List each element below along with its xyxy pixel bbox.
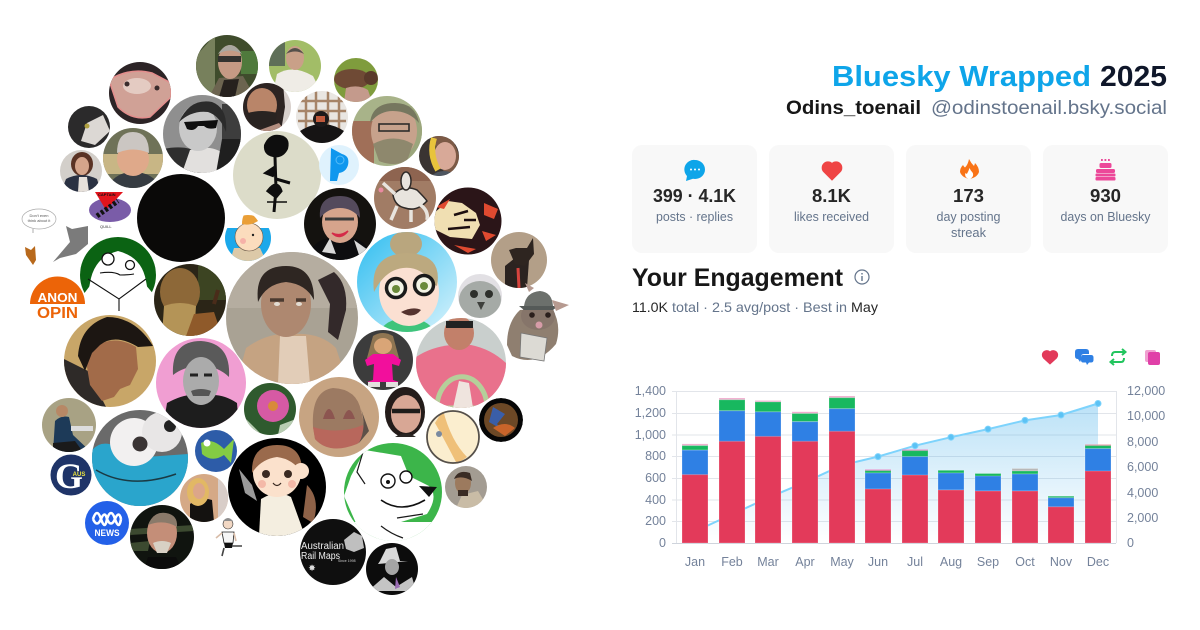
icon: birthday cake <box>1096 159 1116 180</box>
bar: Aug <box>938 470 964 543</box>
avatar: stern man with crow <box>226 252 358 384</box>
chart grid <box>672 391 1116 543</box>
avatar: smiling man in beanie <box>103 128 163 188</box>
right axis labels: 0 <box>1127 536 1134 550</box>
month labels: Mar <box>757 555 779 569</box>
month labels: Nov <box>1050 555 1073 569</box>
month labels: Dec <box>1087 555 1109 569</box>
avatar: cartoon blonde with glasses <box>357 231 457 332</box>
avatar: cartoon reporter with quiff <box>225 212 271 261</box>
avatar: small black and tan dog <box>491 232 547 288</box>
avatar: man in pink unicorn shirt <box>416 316 506 408</box>
avatar: Australian Rail Maps logo: Since 1998 <box>338 559 356 563</box>
month labels: Feb <box>721 555 743 569</box>
avatar: Anon Opin logo: OPIN <box>37 305 78 322</box>
avatar: possum with hat and newspaper <box>507 283 569 361</box>
avatar: bearded wizard with cigar <box>154 264 226 336</box>
icon: info <box>855 270 869 284</box>
avatar: grey haired man with moustache <box>352 96 422 166</box>
right axis labels: 12,000 <box>1127 384 1165 398</box>
avatar: bookshelf photographer <box>296 91 348 143</box>
avatar: tuxedo cat <box>68 106 110 148</box>
avatar: Australian Rail Maps logo: Rail Maps <box>301 551 340 562</box>
panel: day posting streak <box>906 145 1031 253</box>
bar: Jun <box>865 470 891 543</box>
right axis labels: 10,000 <box>1127 409 1165 423</box>
avatar: Guardian AUS logo <box>50 454 92 496</box>
avatar: bearded man <box>243 83 291 131</box>
bar: May <box>829 396 855 543</box>
icon: chat bubble <box>684 160 705 181</box>
panel: likes received: 8.1K <box>812 186 851 206</box>
panel: day posting streak: 173 <box>953 186 984 206</box>
panel: likes received: likes received <box>794 209 869 224</box>
avatar: blonde woman in black <box>180 474 228 522</box>
left axis labels: 600 <box>645 471 666 485</box>
avatar: captain quill badge: QUILL <box>100 224 112 229</box>
avatar: captain quill badge: CAPTAIN <box>98 192 116 197</box>
left axis labels: 1,400 <box>635 384 666 398</box>
avatar: black stick figure on cream <box>233 131 321 219</box>
bar: Jul <box>902 450 928 543</box>
right axis labels: 4,000 <box>1127 486 1158 500</box>
avatar: ABC News logo: NEWS <box>94 528 120 538</box>
chart legend icons <box>1042 349 1160 365</box>
avatar: blonde hair drawing <box>426 410 480 464</box>
avatar: speech bubble comic: Don't even <box>30 213 48 218</box>
month labels: Jan <box>685 555 705 569</box>
avatar: woman in dark jacket <box>60 150 102 192</box>
month labels: Aug <box>940 555 962 569</box>
panel: days on Bluesky <box>1043 145 1168 253</box>
avatar: blue muppet <box>92 410 188 506</box>
avatar: noir man in hat <box>366 543 418 595</box>
avatar: smiling woman with red lipstick <box>304 188 376 260</box>
cumulative area <box>695 404 1098 543</box>
user name and handle <box>786 98 1167 119</box>
avatar: speech bubble comic <box>22 209 88 265</box>
panel: days on Bluesky: 930 <box>1090 186 1121 206</box>
panel: likes received <box>769 145 894 253</box>
avatar: Australian Rail Maps logo <box>300 519 366 585</box>
heading: Your Engagement: Your Engagement <box>632 264 844 292</box>
avatar: captain quill badge <box>89 192 131 229</box>
avatar: Guardian AUS logo: G <box>55 456 83 496</box>
avatar: ABC News logo <box>85 501 129 545</box>
avatar: baby hippo <box>109 62 171 124</box>
icon: quotes <box>1145 350 1160 365</box>
engagement summary: 11.0K <box>632 299 669 315</box>
avatar bubble cluster <box>22 35 569 595</box>
avatar: wildlife photographer <box>42 398 96 452</box>
engagement summary <box>632 299 878 315</box>
panel: day posting streak: streak <box>951 225 986 240</box>
panel: days on Bluesky: days on Bluesky <box>1060 209 1151 224</box>
panel: day posting streak: day posting <box>936 209 1000 224</box>
stacked bars <box>682 396 1111 543</box>
bar: Dec <box>1085 445 1111 543</box>
avatar: painted stone <box>299 377 379 457</box>
bar: Oct <box>1012 468 1038 543</box>
avatar: Caravaggio portrait <box>445 466 488 508</box>
panel: posts and replies: posts · replies <box>656 209 733 224</box>
avatar: green frog cartoon <box>80 237 156 313</box>
avatar: Guardian AUS logo: AUS <box>73 472 85 478</box>
avatar: woman with dark hair and round glasses <box>385 387 425 437</box>
bar: Feb <box>719 398 745 543</box>
right axis labels: 6,000 <box>1127 460 1158 474</box>
bar: Apr <box>792 412 818 543</box>
avatar: dark fantasy art <box>479 398 523 442</box>
avatar: cartoon white wolf on green <box>344 443 442 541</box>
avatar: man in white shirt <box>269 40 321 92</box>
avatar: brown curly dog <box>334 58 378 102</box>
avatar: black and white woman in sunglasses <box>163 95 242 173</box>
avatar: green fish <box>195 430 237 472</box>
avatar: pink cartoon dog in tracksuit <box>353 330 413 390</box>
left axis labels: 800 <box>645 449 666 463</box>
left axis labels: 1,200 <box>635 406 666 420</box>
avatar: dark haired man in profile <box>64 315 156 407</box>
user name and handle: Odins_toenail <box>786 98 921 119</box>
avatar: Australian Rail Maps logo: Australian <box>301 541 344 552</box>
avatar: Australian Rail Maps logo: ✸ <box>308 563 316 573</box>
user name and handle: @odinstoenail.bsky.social <box>931 98 1167 119</box>
right axis labels <box>1127 384 1165 550</box>
cumulative line <box>695 400 1101 531</box>
left axis labels: 0 <box>659 536 666 550</box>
avatar: pink flower <box>244 383 296 435</box>
icon: replies <box>1075 349 1094 365</box>
bar: Nov <box>1048 496 1074 543</box>
title: Bluesky Wrapped <box>832 61 1091 93</box>
bar: Jan <box>682 444 708 543</box>
panel: posts and replies <box>632 145 757 253</box>
icon: reposts <box>1110 349 1126 365</box>
avatar: graffiti mouse <box>374 167 436 229</box>
avatar: Anon Opin logo <box>30 276 85 322</box>
avatar: older man at night <box>130 505 194 569</box>
right axis labels: 8,000 <box>1127 435 1158 449</box>
engagement summary: total · 2.5 avg/post · Best in <box>672 299 847 315</box>
panel: posts and replies: 399 · 4.1K <box>653 186 736 206</box>
icon: flame <box>960 159 979 179</box>
avatar: graffiti cat <box>434 187 502 255</box>
chart: monthly engagement stacked bars with cumulative line <box>635 384 1165 569</box>
month labels: Oct <box>1015 555 1035 569</box>
avatar: cartoon chef with knife <box>228 438 326 536</box>
left axis labels: 400 <box>645 493 666 507</box>
month labels: Sep <box>977 555 999 569</box>
month labels <box>685 555 1109 569</box>
avatar: persian cat <box>458 274 502 319</box>
avatar: blue P logo <box>319 145 359 185</box>
month labels: Jul <box>907 555 923 569</box>
month labels: May <box>830 555 855 569</box>
avatar: Anon Opin logo: ANON <box>38 290 78 305</box>
title: 2025 <box>1100 61 1167 93</box>
left axis labels <box>635 384 666 550</box>
left axis labels: 200 <box>645 514 666 528</box>
month labels: Jun <box>868 555 888 569</box>
bar: Sep <box>975 474 1001 543</box>
avatar: speech bubble comic: think about it <box>28 218 51 223</box>
right axis labels: 2,000 <box>1127 511 1158 525</box>
avatar: solid black circle <box>137 174 225 262</box>
bar: Mar <box>755 400 781 543</box>
engagement summary: May <box>851 299 878 315</box>
icon: likes <box>1042 351 1058 364</box>
avatar: woman with banana <box>419 135 459 176</box>
avatar: cartoon runner <box>216 518 242 556</box>
avatar: man with glasses outdoors <box>196 35 258 97</box>
month labels: Apr <box>795 555 815 569</box>
avatar: Einstein on pink <box>156 338 246 428</box>
icon: heart <box>822 162 842 180</box>
left axis labels: 1,000 <box>635 428 666 442</box>
